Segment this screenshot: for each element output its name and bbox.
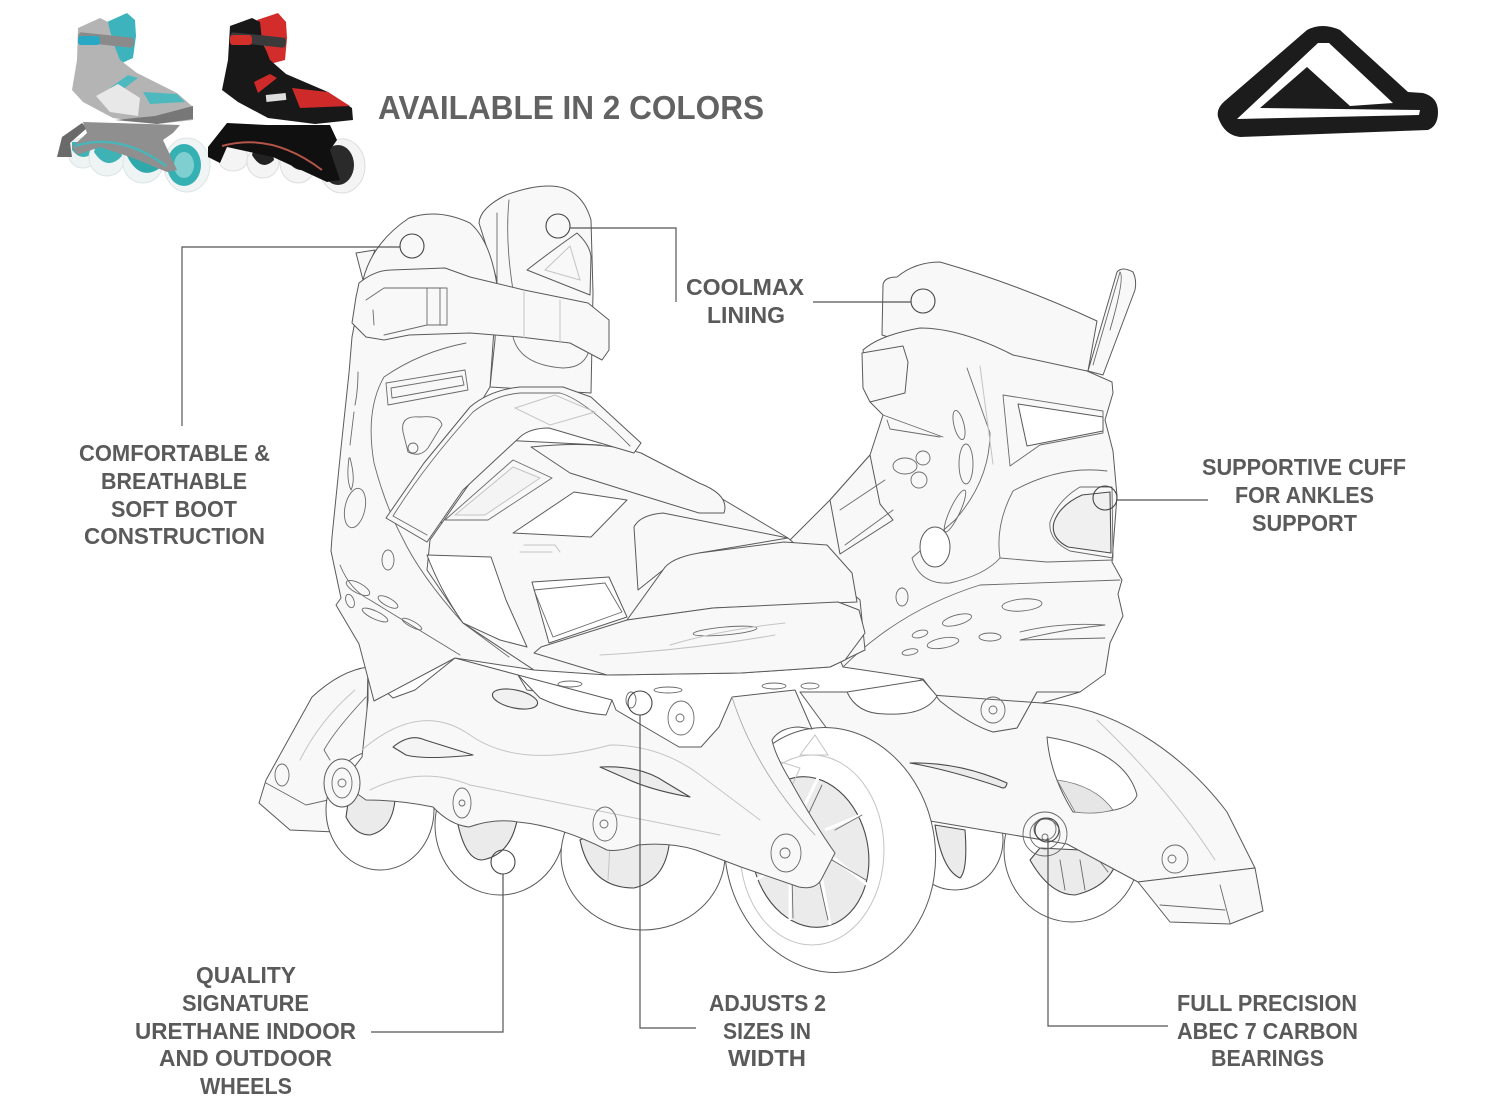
callout text: COMFORTABLE &: [79, 440, 270, 466]
leader line, near skate: [570, 228, 676, 302]
callout text: SIZES IN: [723, 1018, 811, 1044]
callout: supportive cuff: [1093, 454, 1406, 536]
heading: available colours: AVAILABLE IN 2 COLORS: [378, 89, 764, 126]
callout: carbon bearings: [1035, 818, 1358, 1071]
callout text: ADJUSTS 2: [709, 990, 826, 1016]
callout text: LINING: [707, 302, 785, 328]
callout text: WHEELS: [200, 1073, 292, 1099]
callout text: SUPPORT: [1252, 510, 1357, 536]
callout marker, near skate: [546, 214, 570, 238]
callout: urethane wheels: [135, 850, 515, 1099]
callout marker: [491, 850, 515, 874]
near skate frame: [324, 658, 835, 888]
callout text: ABEC 7 CARBON: [1177, 1018, 1358, 1044]
callout marker: [1093, 486, 1117, 510]
callout: coolmax lining: [546, 214, 935, 328]
callout text: [1202, 454, 1406, 536]
near skate tongue and rear pad: [479, 186, 593, 393]
callout text: SOFT BOOT: [111, 496, 237, 522]
far skate cuff and shell: [790, 328, 1123, 732]
callout text: SIGNATURE: [182, 990, 309, 1016]
callout: soft boot construction: [79, 234, 424, 549]
product thumbnail: black and red skate: [208, 13, 365, 193]
product thumbnail: teal and grey skate: [57, 13, 210, 192]
leader line: [1048, 838, 1168, 1026]
callout text: [709, 990, 826, 1071]
callout text: WIDTH: [728, 1045, 806, 1071]
near skate wheels: [259, 667, 955, 989]
callout: adjustable width: [628, 691, 826, 1071]
callout text: QUALITY: [196, 962, 296, 988]
callout marker: [400, 234, 424, 258]
callout marker, far skate: [911, 289, 935, 313]
far skate rear frame and guard: [800, 692, 1263, 924]
callout text: [79, 440, 270, 549]
callout marker: [1035, 818, 1059, 842]
illustration: near skate, side view: [259, 186, 955, 989]
leader line: [182, 247, 400, 426]
near skate upper and toe panels: [386, 387, 865, 675]
leader line: [1117, 499, 1208, 501]
callout text: AND OUTDOOR: [159, 1045, 332, 1071]
far skate boot liner and pull tab: [882, 262, 1136, 375]
callout text: [686, 274, 805, 328]
near skate shell and cuff: [331, 214, 534, 701]
callout text: COOLMAX: [686, 274, 805, 300]
illustration: far skate, rear view: [790, 262, 1263, 924]
near skate strap and buckle: [352, 268, 609, 360]
callout text: CONSTRUCTION: [84, 523, 265, 549]
callout text: BEARINGS: [1211, 1045, 1324, 1071]
leader line: [640, 715, 696, 1028]
callout text: SUPPORTIVE CUFF: [1202, 454, 1406, 480]
leader line: [371, 874, 503, 1032]
leader line, far skate: [813, 301, 911, 303]
callout text: BREATHABLE: [101, 468, 247, 494]
callout text: FULL PRECISION: [1177, 990, 1357, 1016]
callout text: [1177, 990, 1358, 1071]
icon: brand logo: [1218, 26, 1438, 137]
near skate toe cap: [534, 542, 865, 675]
callout text: FOR ANKLES: [1235, 482, 1374, 508]
callout text: URETHANE INDOOR: [135, 1018, 356, 1044]
far skate wheels: [907, 778, 1140, 922]
callout text: [135, 962, 356, 1099]
callout marker: [628, 691, 652, 715]
